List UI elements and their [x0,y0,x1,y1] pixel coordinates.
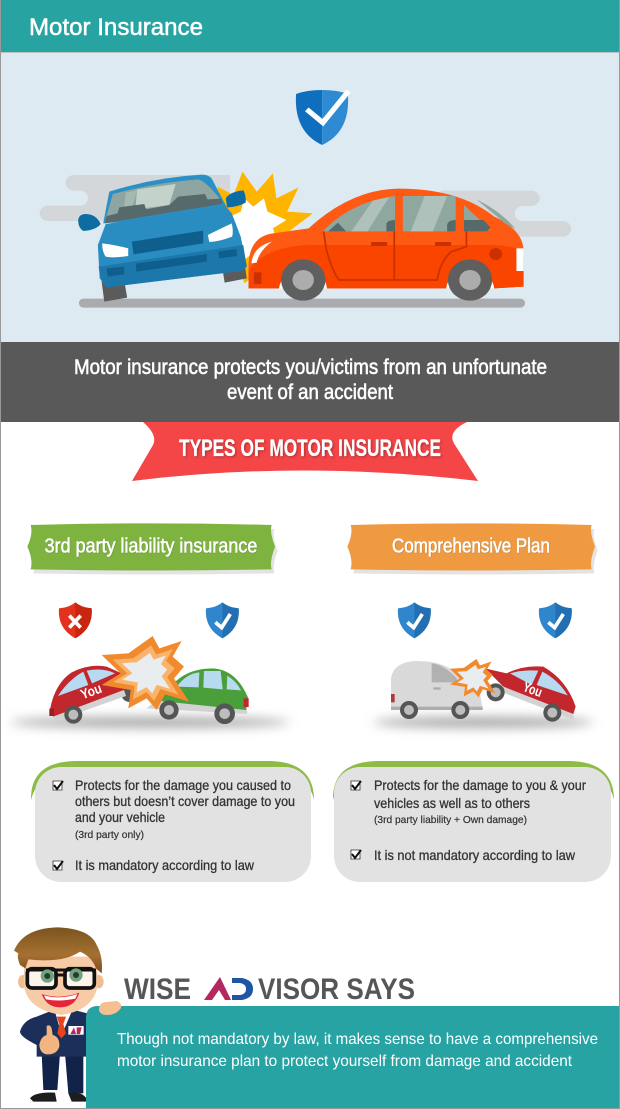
check item: protects you and others [351,777,586,826]
wheels [281,259,325,301]
check item: protects others: others but doesn’t cover damage to you [75,793,295,809]
icon: blue shield with check, left [398,602,431,638]
heading: wise advisor says [124,973,415,1006]
advice text: Though not mandatory by law, it makes sense to have a comprehensive [117,1031,598,1048]
ground shadow [10,717,290,728]
caption text [74,356,547,404]
heading: wise advisor says: WISE [124,973,191,1006]
explosion star [450,659,495,697]
legs and shoes [42,1053,83,1093]
check item: protects you and others: (3rd party liability + Own damage) [374,814,527,826]
explosion star [102,636,189,710]
advice text [117,1031,598,1070]
panel: comprehensive plan illustration [347,523,598,728]
red car labelled You: You [78,680,104,702]
heading banner: types of motor insurance [132,422,478,481]
check item: protects others: (3rd party only) [75,829,144,841]
ribbon: comprehensive plan [347,523,598,574]
icon: blue shield with check, right [539,602,572,638]
check item: protects others: and your vehicle [75,809,165,825]
advice text: motor insurance plan to protect yourself from damage and accident [117,1053,573,1070]
blue car [78,175,247,302]
orange car [249,189,524,301]
panel: 3rd party details card [31,761,314,882]
suit jacket [20,1009,87,1057]
head [18,975,27,988]
panel: 3rd party liability illustration [10,523,290,728]
smile [42,993,79,1007]
side mirrors [78,214,101,231]
hand on panel [99,1001,121,1015]
check item: protects others: Protects for the damage you caused to [75,777,291,793]
smoke clouds [40,175,571,237]
dark caption band [1,342,619,422]
ribbon: 3rd party liability insurance [27,523,278,574]
advisor character [14,927,104,1102]
check item: not mandatory: It is not mandatory according to law [374,847,576,863]
caption text: Motor insurance protects you/victims from an unfortunate [74,356,547,379]
heading banner: types of motor insurance: TYPES OF MOTOR INSURANCE [179,435,441,462]
check item: mandatory: It is mandatory according to law [75,857,255,873]
road [79,299,525,308]
panel: advice callout [86,1001,620,1109]
green car [147,668,249,724]
panel: comprehensive details card [333,761,614,882]
icon: blue shield with check [206,602,239,638]
red car labelled You [485,666,576,722]
ground shadow [373,717,593,728]
check item: protects others [53,777,295,841]
logo mark: AD [204,977,253,1000]
panel: hero crash illustration [1,53,619,342]
red car labelled You [49,666,137,724]
page title: Motor Insurance [29,14,203,41]
hair [14,927,102,973]
thumbs-up hand [39,1025,59,1054]
caption text: event of an accident [227,381,393,404]
ribbon: comprehensive plan: Comprehensive Plan [392,536,550,558]
heading: wise advisor says: VISOR SAYS [258,973,415,1006]
glasses [26,968,96,988]
shield icon [296,90,349,145]
check item: protects you and others: vehicles as well as to others [374,795,530,811]
ribbon: 3rd party liability insurance: 3rd party liability insurance [45,536,257,558]
header bar [0,0,620,54]
red car labelled You: You [521,678,545,700]
icon: red shield with cross [59,602,92,638]
explosion [217,172,313,283]
check item: protects you and others: Protects for the damage to you & your [374,777,586,793]
white van [391,661,483,719]
